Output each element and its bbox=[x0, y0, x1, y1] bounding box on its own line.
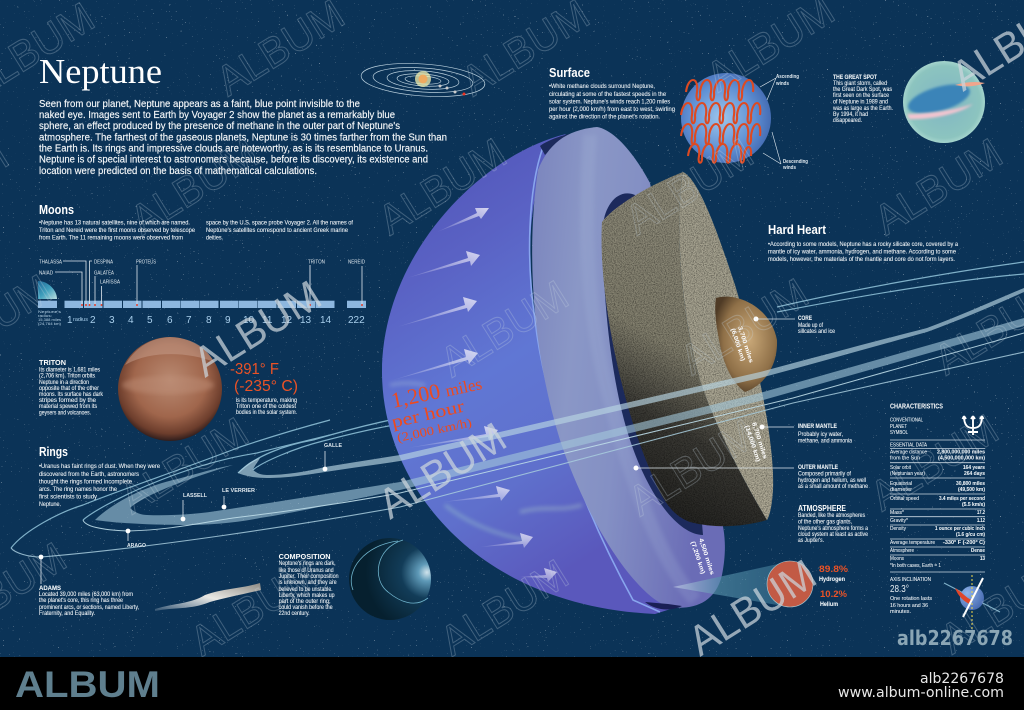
panel: Triton bbox=[39, 337, 298, 441]
watermarks: ALBUM bbox=[112, 408, 256, 523]
panel: rings: GALLE bbox=[324, 443, 343, 449]
front half of the rings bbox=[11, 288, 1024, 557]
inner mantle rim bbox=[679, 172, 773, 520]
back half of the rings bbox=[11, 262, 1024, 548]
panel: surface: solar system. Neptune's winds reach 1,200 miles bbox=[549, 99, 670, 106]
panel: the great spot: first seen on the surface bbox=[833, 92, 889, 99]
dark Neptune with rings bbox=[349, 538, 431, 620]
panel: atmosphere: Banded, like the atmospheres bbox=[798, 512, 865, 519]
watermarks: ALBUM bbox=[680, 550, 824, 665]
panel: Triton: Triton one of the coldest bbox=[236, 403, 296, 410]
panel: moons: 12 bbox=[281, 315, 293, 326]
wind planet: winds bbox=[782, 165, 796, 171]
intro text: naked eye. Images sent to Earth by Voyager 2 show the planet as a remarkably blue bbox=[39, 110, 395, 121]
intro text: Seen from our planet, Neptune appears as a faint, blue point invisible to the bbox=[39, 99, 360, 110]
panel: composition: Neptune's rings are dark, bbox=[279, 560, 336, 567]
panel: moons: (24,764 km) bbox=[38, 322, 61, 326]
panel: characteristics: Density bbox=[890, 526, 906, 532]
watermarks: ALBUM bbox=[432, 550, 576, 665]
panel: characteristics: One rotation lasts bbox=[890, 596, 932, 602]
callout: outer mantle: Composed primarily of bbox=[798, 471, 851, 478]
panel: the great spot: THE GREAT SPOT bbox=[833, 74, 877, 81]
great spot sphere bbox=[903, 61, 985, 143]
panel: characteristics: Average temperature bbox=[890, 540, 935, 546]
panel: moons: 15,388 miles bbox=[38, 318, 61, 322]
panel: composition: Jupiter. Their composition bbox=[279, 573, 339, 580]
panel: composition bbox=[279, 554, 339, 617]
panel: moons: Moons bbox=[39, 203, 74, 217]
icon: axis inclination bbox=[944, 575, 1000, 630]
panel: Adams: the planet's core, this ring has three bbox=[39, 597, 123, 604]
panel: Triton: Neptune in a direction bbox=[39, 379, 89, 386]
panel: hard heart: •According to some models, Neptune has a rocky silicate core, covered by a bbox=[768, 241, 958, 248]
intro text bbox=[39, 99, 447, 177]
panel: characteristics: Moons bbox=[890, 556, 904, 562]
panel: moons: 3 bbox=[109, 315, 115, 326]
watermarks: ALBUM bbox=[122, 129, 266, 244]
panel: moons: LARISSA bbox=[100, 280, 121, 286]
panel: atmosphere: cloud system at least as active bbox=[798, 531, 868, 538]
panel: moons: Neptune's satellites correspond to ancient Greek marine bbox=[206, 227, 349, 234]
panel: moons: space by the U.S. space probe Voyager 2. All the names of bbox=[206, 220, 353, 227]
panel: surface: Surface bbox=[549, 66, 590, 80]
panel: surface bbox=[549, 66, 808, 171]
panel: moons: 9 bbox=[225, 315, 231, 326]
panel: composition: believed to be unstable. bbox=[279, 586, 333, 593]
ring fragment bbox=[155, 583, 261, 611]
panel: rings: arcs. The ring names honor the bbox=[39, 486, 118, 493]
panel: moons: 14 bbox=[320, 315, 332, 326]
panel: rings: first scientists to study bbox=[39, 494, 98, 501]
panel: Adams: ADAMS bbox=[39, 585, 61, 592]
wind planet: Ascending bbox=[776, 74, 799, 80]
ring markers bbox=[39, 451, 327, 584]
panel: moons: 7 bbox=[186, 315, 192, 326]
panel: moons: radius: bbox=[38, 314, 52, 318]
panel: Triton: (-235° C) bbox=[234, 378, 298, 395]
distance scale bar bbox=[38, 301, 366, 308]
panel: characteristics: (4,500,000,000 km) bbox=[938, 456, 985, 462]
panel: characteristics: 1 ounce per cubic inch bbox=[935, 526, 985, 532]
panel: characteristics: Gravity* bbox=[890, 518, 909, 524]
intro text: Neptune is of special interest to astronomers because, before its discovery, its existence and bbox=[39, 155, 428, 166]
panel: atmosphere: 10.2% bbox=[820, 589, 848, 600]
footer bar: ALBUM bbox=[15, 664, 160, 705]
panel: characteristics: 16 hours and 36 bbox=[890, 603, 928, 609]
panel: atmosphere: of the other gas giants, bbox=[798, 519, 852, 526]
outer mantle cylinder face bbox=[602, 172, 767, 526]
panel: hard heart bbox=[768, 223, 958, 263]
wind speed callout: 1,200 miles bbox=[389, 369, 484, 413]
panel: characteristics: CONVENTIONAL bbox=[890, 418, 923, 424]
watermarks: ALBUM bbox=[370, 413, 514, 528]
icon: solar system bbox=[360, 60, 486, 100]
panel: Adams bbox=[39, 585, 139, 617]
panel: atmosphere bbox=[673, 504, 868, 608]
watermarks: ALBUM bbox=[862, 405, 1006, 520]
panel: moons: PROTEUS bbox=[136, 260, 157, 266]
panel: characteristics: from the Sun bbox=[890, 456, 920, 462]
panel: moons: deities. bbox=[206, 235, 223, 242]
panel: characteristics: 2,800,000,000 miles bbox=[937, 450, 985, 456]
panel: moons: NAIAD bbox=[39, 270, 53, 276]
panel: moons: NEREID bbox=[348, 260, 365, 266]
watermarks: ALBUM bbox=[185, 271, 329, 386]
panel: the great spot: of Neptune in 1989 and bbox=[833, 99, 888, 106]
callout: inner mantle: INNER MANTLE bbox=[798, 423, 837, 430]
wind speed callout: per hour bbox=[389, 396, 466, 432]
panel: moons: 6 bbox=[167, 315, 173, 326]
panel: characteristics: (Neptunian year) bbox=[890, 471, 925, 477]
panel: composition: part of the outer ring, bbox=[279, 598, 331, 605]
dark hollow bbox=[603, 193, 703, 535]
panel: moons: Neptune's bbox=[38, 310, 61, 314]
panel: atmosphere: as Jupiter's. bbox=[798, 537, 824, 544]
panel: moons: 5 bbox=[147, 315, 153, 326]
dark gap at top bbox=[540, 132, 590, 155]
panel: characteristics: minutes. bbox=[890, 609, 911, 615]
cloud streaks bbox=[390, 383, 582, 540]
panel: characteristics: Dense bbox=[971, 548, 985, 554]
diameter labels: (14,000 km) bbox=[743, 425, 761, 463]
Triton sphere bbox=[118, 337, 222, 441]
callout: core: silicates and ice bbox=[798, 328, 835, 335]
diameter labels: (7,200 km) bbox=[689, 541, 705, 575]
watermarks: ALBUM bbox=[617, 129, 761, 244]
core bbox=[715, 297, 777, 392]
panel: the great spot: This giant storm, called bbox=[833, 80, 887, 87]
callout: outer mantle bbox=[634, 464, 868, 490]
panel: moons bbox=[38, 203, 366, 326]
panel: moons: 8 bbox=[206, 315, 212, 326]
panel: the great spot bbox=[832, 61, 985, 143]
callout: core bbox=[754, 315, 835, 335]
panel: moons: 11 bbox=[262, 315, 273, 326]
panel: Adams: Located 39,000 miles (63,000 km) from bbox=[39, 591, 133, 598]
panel: the great spot: was as large as the Earth. bbox=[832, 105, 893, 112]
panel: characteristics: 30,800 miles bbox=[956, 481, 985, 487]
panel: rings: LE VERRIER bbox=[222, 488, 255, 494]
panel: Triton: bodies in the solar system. bbox=[236, 409, 297, 416]
icon: Neptune symbol bbox=[962, 416, 984, 435]
panel: characteristics: (5.5 km/s) bbox=[962, 502, 985, 508]
panel: characteristics: PLANET bbox=[890, 424, 908, 430]
Adams ring bbox=[11, 352, 1024, 557]
wind speed callout: (2,000 km/h) bbox=[396, 415, 473, 445]
moon leader lines bbox=[55, 261, 362, 304]
panel: characteristics: Equatorial bbox=[890, 481, 912, 487]
panel: moons: THALASSA bbox=[39, 260, 63, 266]
panel: characteristics: (1.6 g/cu cm) bbox=[956, 532, 985, 538]
panel: surface: per hour (2,000 km/h) from east to west, swirling bbox=[549, 106, 676, 113]
panel: characteristics: (49,500 km) bbox=[958, 487, 985, 493]
panel: atmosphere: Helium bbox=[820, 601, 838, 608]
panel: rings: ARAGO bbox=[127, 543, 146, 549]
diameter labels: (6,000 km) bbox=[729, 328, 745, 362]
diameter labels bbox=[689, 326, 768, 576]
panel: Triton: is its temperature, making bbox=[236, 397, 297, 404]
panel: Adams: Fraternity, and Equality. bbox=[39, 610, 95, 617]
composition beam bbox=[673, 562, 787, 606]
panel: rings: Rings bbox=[39, 445, 68, 459]
intro text: atmosphere. The farthest of the gaseous planets, Neptune is 30 times farther from the Sun than bbox=[39, 132, 447, 144]
panel: rings: LASSELL bbox=[183, 493, 207, 499]
wind speed callout bbox=[389, 369, 484, 445]
panel: composition: like those of Uranus and bbox=[279, 567, 334, 574]
panel: moons: •Neptune has 13 natural satellites, nine of which are named. bbox=[39, 220, 190, 227]
panel: composition: Liberty, which makes up bbox=[279, 592, 335, 599]
planet cross-section bbox=[382, 127, 777, 614]
panel: Triton: opposite that of the other bbox=[39, 385, 99, 392]
panel: characteristics: *In both cases, Earth = 1 bbox=[890, 563, 941, 569]
panel: characteristics: 17.2 bbox=[977, 510, 985, 516]
panel: atmosphere: ATMOSPHERE bbox=[798, 504, 847, 513]
footer bar: alb2267678 bbox=[920, 671, 1004, 687]
panel: rings: discovered from the Earth, astronomers bbox=[39, 471, 139, 478]
panel: Triton: -391° F bbox=[230, 361, 279, 378]
panel: characteristics: AXIS INCLINATION bbox=[890, 577, 931, 583]
panel: composition: could vanish before the bbox=[279, 604, 333, 611]
footer bar: www.album-online.com bbox=[838, 685, 1004, 701]
panel: Triton: (2,706 km). Triton orbits bbox=[39, 373, 95, 380]
panel: characteristics: Solar orbit bbox=[890, 465, 911, 471]
panel: rings bbox=[39, 443, 343, 584]
panel: characteristics: 264 days bbox=[964, 471, 985, 477]
panel: composition: 22nd century. bbox=[279, 610, 310, 617]
panel: characteristics: 3.4 miles per second bbox=[939, 496, 985, 502]
outer hemisphere bbox=[382, 134, 680, 614]
panel: moons: 2 bbox=[90, 315, 96, 326]
panel: atmosphere: Neptune's atmosphere forms a bbox=[798, 525, 868, 532]
panel: moons: radius bbox=[73, 317, 88, 323]
callout: inner mantle: Probably icy water, bbox=[798, 431, 843, 438]
panel: Triton: TRITON bbox=[39, 360, 66, 367]
wind planet bbox=[681, 73, 808, 171]
panel: composition: COMPOSITION bbox=[279, 554, 331, 561]
panel: characteristics: SYMBOL bbox=[890, 430, 908, 436]
wind arrows bbox=[393, 208, 557, 582]
panel: the great spot: disappeared. bbox=[833, 117, 862, 124]
wind planet: Descending bbox=[783, 159, 808, 165]
callout: core: CORE bbox=[798, 315, 812, 322]
panel: moons: TRITON bbox=[308, 260, 325, 266]
panel: moons: from Earth. The 11 remaining moons were observed from bbox=[39, 235, 183, 242]
panel: rings: •Uranus has faint rings of dust. When they were bbox=[39, 463, 161, 470]
panel: surface: circulating at some of the fastest speeds in the bbox=[549, 91, 667, 98]
watermarks: ALBUM bbox=[370, 129, 514, 244]
watermarks: ALBUM bbox=[432, 271, 576, 386]
panel: moons: 10 bbox=[243, 315, 255, 326]
panel: hard heart: models, however, the materials of the mantle and core do not form layers. bbox=[768, 256, 955, 263]
watermarks: ALBUM bbox=[866, 129, 1010, 244]
panel: characteristics: 28.3° bbox=[890, 583, 909, 595]
intro text: sphere, an effect produced by the presence of methane in the outer part of Neptune's bbox=[39, 121, 400, 132]
gas composition disc bbox=[767, 561, 813, 607]
panel: Triton: stripes formed by the bbox=[39, 397, 97, 404]
panel: hard heart: Hard Heart bbox=[768, 223, 827, 237]
panel: characteristics: diameter bbox=[890, 487, 912, 493]
panel: moons: Triton and Nereid were the first moons observed by telescope bbox=[39, 227, 196, 234]
panel: characteristics bbox=[890, 404, 1000, 630]
hemisphere rim bbox=[530, 147, 660, 612]
panel: atmosphere: 89.8% bbox=[819, 564, 849, 575]
panel: characteristics: 13 bbox=[980, 556, 985, 562]
panel: characteristics: Average distance bbox=[890, 450, 927, 456]
panel: surface: •White methane clouds surround Neptune, bbox=[549, 83, 655, 90]
panel: characteristics: 164 years bbox=[963, 465, 985, 471]
Le Verrier ring bbox=[95, 318, 1024, 525]
panel: characteristics: Mass* bbox=[890, 510, 905, 516]
atmosphere torus bbox=[532, 127, 725, 608]
panel: Adams: prominent arcs, or sections, named Liberty, bbox=[39, 604, 139, 611]
panel: Triton: Its diameter is 1,681 miles bbox=[39, 367, 100, 374]
panel: atmosphere: Hydrogen bbox=[819, 576, 845, 583]
panel: rings: thought the rings formed incomplete bbox=[39, 479, 133, 486]
callout: outer mantle: hydrogen and helium, as well bbox=[798, 477, 866, 484]
panel: composition: is unknown, and they are bbox=[279, 579, 337, 586]
watermarks: ALBUM bbox=[620, 410, 764, 525]
panel: moons: DESPINA bbox=[94, 260, 114, 266]
callout: outer mantle: OUTER MANTLE bbox=[798, 464, 838, 471]
panel: characteristics: Atmosphere bbox=[890, 548, 914, 554]
panel: the great spot: By 1994, it had bbox=[833, 111, 868, 118]
panel: hard heart: mantle of icy water, ammonia, hydrogen, and methane. According to some bbox=[768, 248, 957, 255]
panel: characteristics: 1.12 bbox=[977, 518, 985, 524]
title: Neptune bbox=[39, 52, 162, 91]
panel: surface: against the direction of the planet's rotation. bbox=[549, 114, 660, 121]
panel: characteristics: ESSENTIAL DATA bbox=[890, 443, 927, 449]
icon: Neptune limb bbox=[38, 281, 57, 299]
panel: Triton: geysers and volcanoes. bbox=[39, 410, 91, 417]
callout: inner mantle: methane, and ammonia bbox=[798, 438, 852, 445]
Galle ring bbox=[238, 288, 1024, 478]
watermarks: ALBUM bbox=[182, 550, 326, 665]
callout: inner mantle bbox=[760, 423, 852, 445]
panel: characteristics: -330° F (-200° C) bbox=[943, 540, 985, 546]
panel: moons: 4 bbox=[128, 315, 134, 326]
panel: rings: Neptune. bbox=[39, 501, 61, 508]
intro text: location were predicted on the basis of mathematical calculations. bbox=[39, 166, 317, 177]
Arago ring bbox=[83, 333, 1024, 531]
footer bar bbox=[0, 657, 1024, 710]
panel: characteristics: CHARACTERISTICS bbox=[890, 404, 943, 411]
callout: outer mantle: as a small amount of methane bbox=[798, 483, 868, 490]
panel: Triton: moons. Its surface has dark bbox=[39, 391, 104, 398]
panel: the great spot: the Great Dark Spot, was bbox=[833, 86, 892, 93]
watermarks: ALBUM bbox=[672, 269, 816, 384]
panel: moons: GALATEA bbox=[94, 270, 115, 276]
intro text: the Earth is. Its rings and impressive clouds are noteworthy, as is its resemblance to Uranus. bbox=[39, 144, 428, 155]
wind planet: winds bbox=[775, 81, 789, 87]
panel: moons: 222 bbox=[348, 315, 365, 326]
panel: moons: 1 bbox=[67, 315, 73, 326]
diameter labels: 3,700 miles bbox=[736, 326, 754, 364]
diameter labels: 4,500 miles bbox=[697, 538, 715, 576]
panel: moons: 13 bbox=[300, 315, 312, 326]
panel: Triton: material spewed from its bbox=[39, 403, 97, 410]
diameter labels: 8,700 miles bbox=[750, 422, 768, 460]
panel: characteristics: Orbital speed bbox=[890, 496, 919, 502]
callout: core: Made up of bbox=[798, 322, 823, 329]
